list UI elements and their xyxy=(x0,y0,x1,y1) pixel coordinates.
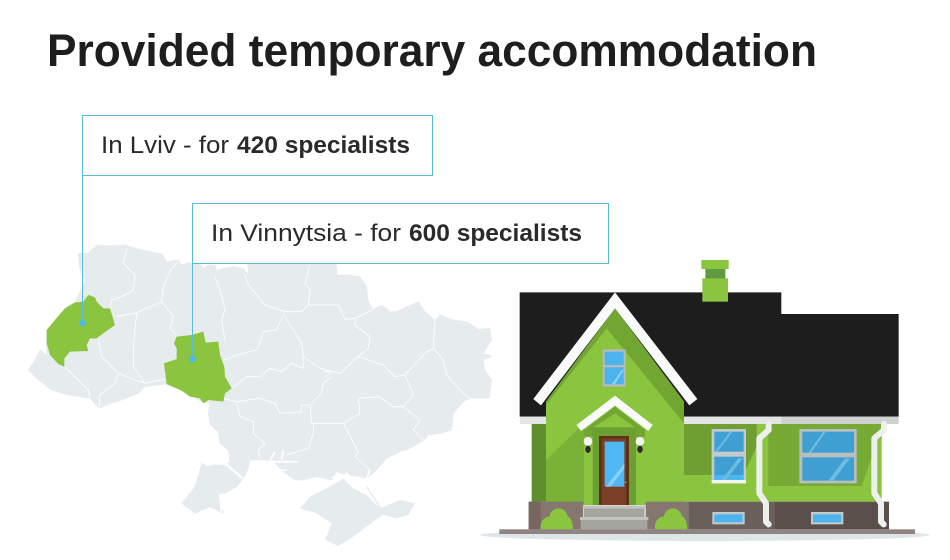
ground slab xyxy=(499,529,915,534)
map of Ukraine xyxy=(28,245,492,546)
icon: house xyxy=(480,260,930,541)
callout: Lviv xyxy=(79,116,432,326)
gable xyxy=(546,308,684,505)
Arabat spit xyxy=(367,487,381,508)
steps xyxy=(580,505,648,529)
chimney xyxy=(701,260,729,302)
callout: Lviv: In Lviv - for xyxy=(101,132,229,159)
eaves xyxy=(520,417,899,424)
bushes xyxy=(541,508,687,529)
callout: Vinnytsia: In Vinnytsia - for xyxy=(211,220,401,247)
title: Provided temporary accommodation xyxy=(47,25,817,76)
roof trim xyxy=(533,292,697,405)
roof xyxy=(520,292,899,417)
gable window xyxy=(603,349,626,387)
door xyxy=(599,436,629,505)
basement windows xyxy=(712,512,843,524)
right windows xyxy=(712,429,857,483)
foundation xyxy=(529,502,889,529)
ground shadow xyxy=(480,529,930,541)
region: Vinnytsia xyxy=(164,332,232,403)
porch xyxy=(584,407,645,505)
wall lamps xyxy=(584,437,644,453)
callout: Lviv: 420 specialists xyxy=(237,132,410,159)
gutters xyxy=(759,424,884,524)
callout: Vinnytsia: 600 specialists xyxy=(409,220,582,247)
Crimea xyxy=(300,478,415,546)
callout: Vinnytsia xyxy=(189,204,608,362)
region borders xyxy=(64,248,470,512)
walls xyxy=(532,424,882,502)
region: Lviv xyxy=(47,295,115,367)
mainland xyxy=(28,245,492,513)
